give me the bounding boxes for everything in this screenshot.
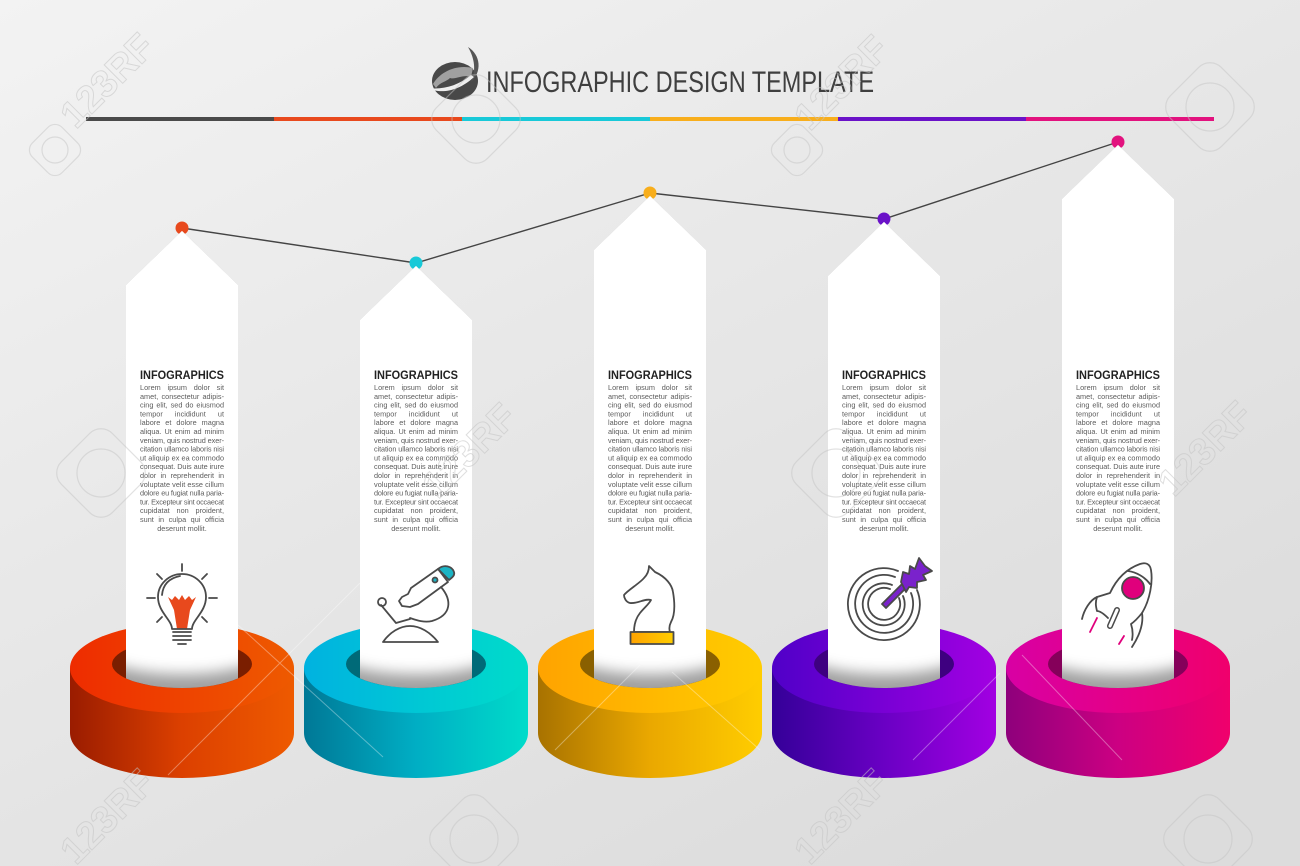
- logo mark: [428, 47, 479, 100]
- body text: labore et dolore magna: [140, 418, 225, 427]
- body text: voluptate velit esse cillum: [374, 480, 458, 489]
- body text: tempor incididunt ut: [608, 409, 692, 418]
- body text: cupidatat non proident,: [608, 506, 692, 515]
- body text: citation ullamco laboris nisi: [1076, 445, 1160, 454]
- step 3: [538, 185, 762, 778]
- body text: consequat. Duis aute irure: [608, 462, 692, 471]
- body text: dolore eu fugiat nulla paria-: [608, 489, 693, 498]
- body text: voluptate velit esse cillum: [608, 480, 692, 489]
- body text: sunt in culpa qui officia: [140, 515, 225, 524]
- body text: dolor in reprehenderit in: [1076, 471, 1160, 480]
- body text: dolor in reprehenderit in: [374, 471, 458, 480]
- marker dot: [410, 256, 422, 270]
- body text: cing elit, sed do eiusmod: [1076, 401, 1160, 410]
- body text: voluptate velit esse cillum: [842, 480, 926, 489]
- body text: amet, consectetur adipis-: [374, 392, 459, 401]
- body text: sunt in culpa qui officia: [1076, 515, 1161, 524]
- body text: dolore eu fugiat nulla paria-: [140, 489, 225, 498]
- step 5: [1006, 135, 1230, 778]
- body text: [608, 383, 693, 533]
- heading: INFOGRAPHICS: [140, 368, 224, 382]
- body text: citation ullamco laboris nisi: [140, 445, 224, 454]
- heading: INFOGRAPHICS: [608, 368, 692, 382]
- body text: Lorem ipsum dolor sit: [374, 383, 458, 392]
- base ring: purple: [772, 623, 996, 778]
- body text: deserunt mollit.: [157, 524, 207, 533]
- base ring: amber: [538, 623, 762, 778]
- body text: veniam, quis nostrud exer-: [374, 436, 459, 445]
- colour bar: [86, 117, 1214, 121]
- arrow column: [594, 196, 706, 688]
- body text: dolor in reprehenderit in: [608, 471, 692, 480]
- heading: INFOGRAPHICS: [1076, 368, 1160, 382]
- marker dot: [176, 222, 188, 234]
- body text: tur. Excepteur sint occaecat: [1076, 497, 1160, 506]
- body text: aliqua. Ut enim ad minim: [140, 427, 224, 436]
- header: [86, 47, 1214, 121]
- body text: veniam, quis nostrud exer-: [140, 436, 225, 445]
- base ring: red: [70, 623, 294, 778]
- step 4: [772, 210, 996, 778]
- body text: [140, 383, 225, 533]
- body text: dolore eu fugiat nulla paria-: [374, 489, 459, 498]
- body text: voluptate velit esse cillum: [1076, 480, 1160, 489]
- body text: amet, consectetur adipis-: [842, 392, 927, 401]
- body text: Lorem ipsum dolor sit: [140, 383, 224, 392]
- watermark: 123RF: [1151, 394, 1261, 504]
- base ring: magenta: [1006, 623, 1230, 778]
- body text: labore et dolore magna: [1076, 418, 1161, 427]
- body text: labore et dolore magna: [842, 418, 927, 427]
- body text: amet, consectetur adipis-: [608, 392, 693, 401]
- body text: tempor incididunt ut: [374, 409, 458, 418]
- body text: tur. Excepteur sint occaecat: [608, 497, 692, 506]
- body text: tempor incididunt ut: [1076, 409, 1160, 418]
- watermark: 123RF: [53, 26, 163, 136]
- body text: Lorem ipsum dolor sit: [842, 383, 926, 392]
- body text: cing elit, sed do eiusmod: [608, 401, 692, 410]
- body text: cing elit, sed do eiusmod: [374, 401, 458, 410]
- body text: Lorem ipsum dolor sit: [608, 383, 692, 392]
- body text: [1076, 383, 1161, 533]
- body text: amet, consectetur adipis-: [1076, 392, 1161, 401]
- body text: deserunt mollit.: [625, 524, 675, 533]
- body text: cing elit, sed do eiusmod: [842, 401, 926, 410]
- body text: aliqua. Ut enim ad minim: [1076, 427, 1160, 436]
- body text: tur. Excepteur sint occaecat: [140, 497, 224, 506]
- body text: deserunt mollit.: [1093, 524, 1143, 533]
- body text: labore et dolore magna: [374, 418, 459, 427]
- icon: chess knight: [624, 566, 674, 644]
- body text: dolore eu fugiat nulla paria-: [842, 489, 927, 498]
- watermark: 123RF: [787, 28, 897, 138]
- body text: consequat. Duis aute irure: [374, 462, 458, 471]
- body text: veniam, quis nostrud exer-: [608, 436, 693, 445]
- body text: cupidatat non proident,: [140, 506, 224, 515]
- body text: dolor in reprehenderit in: [140, 471, 224, 480]
- body text: [842, 383, 927, 533]
- body text: dolor in reprehenderit in: [842, 471, 926, 480]
- body text: citation ullamco laboris nisi: [842, 445, 926, 454]
- body text: aliqua. Ut enim ad minim: [842, 427, 926, 436]
- body text: ut aliquip ex ea commodo: [374, 453, 458, 462]
- body text: citation ullamco laboris nisi: [608, 445, 692, 454]
- body text: ut aliquip ex ea commodo: [608, 453, 692, 462]
- body text: tempor incididunt ut: [140, 409, 224, 418]
- body text: tempor incididunt ut: [842, 409, 926, 418]
- marker dot: [1112, 136, 1124, 148]
- step 2: [304, 255, 528, 778]
- base ring: cyan: [304, 623, 528, 778]
- body text: dolore eu fugiat nulla paria-: [1076, 489, 1161, 498]
- body text: cing elit, sed do eiusmod: [140, 401, 224, 410]
- heading: INFOGRAPHICS: [842, 368, 926, 382]
- watermark: 123RF: [415, 396, 525, 506]
- marker dot: [644, 186, 656, 200]
- icon: rocket: [1082, 563, 1152, 647]
- body text: cupidatat non proident,: [1076, 506, 1160, 515]
- title: INFOGRAPHIC DESIGN TEMPLATE: [486, 66, 874, 99]
- body text: sunt in culpa qui officia: [842, 515, 927, 524]
- body text: aliqua. Ut enim ad minim: [608, 427, 692, 436]
- arrow column: [1062, 145, 1174, 688]
- icon: target with dart: [848, 558, 932, 640]
- body text: aliqua. Ut enim ad minim: [374, 427, 458, 436]
- step 1: [70, 220, 294, 778]
- body text: Lorem ipsum dolor sit: [1076, 383, 1160, 392]
- body text: cupidatat non proident,: [374, 506, 458, 515]
- body text: tur. Excepteur sint occaecat: [842, 497, 926, 506]
- arrow column: [126, 231, 238, 688]
- body text: veniam, quis nostrud exer-: [1076, 436, 1161, 445]
- body text: consequat. Duis aute irure: [842, 462, 926, 471]
- body text: consequat. Duis aute irure: [140, 462, 224, 471]
- body text: consequat. Duis aute irure: [1076, 462, 1160, 471]
- arrow column: [828, 222, 940, 688]
- heading: INFOGRAPHICS: [374, 368, 458, 382]
- body text: veniam, quis nostrud exer-: [842, 436, 927, 445]
- icon: light bulb: [147, 564, 217, 644]
- body text: labore et dolore magna: [608, 418, 693, 427]
- body text: cupidatat non proident,: [842, 506, 926, 515]
- body text: deserunt mollit.: [391, 524, 441, 533]
- body text: ut aliquip ex ea commodo: [140, 453, 224, 462]
- body text: [374, 383, 459, 533]
- body text: voluptate velit esse cillum: [140, 480, 224, 489]
- body text: sunt in culpa qui officia: [608, 515, 693, 524]
- arrow column: [360, 266, 472, 688]
- body text: ut aliquip ex ea commodo: [1076, 453, 1160, 462]
- body text: amet, consectetur adipis-: [140, 392, 225, 401]
- body text: tur. Excepteur sint occaecat: [374, 497, 458, 506]
- marker dot: [878, 212, 890, 226]
- body text: deserunt mollit.: [859, 524, 909, 533]
- icon: microscope: [378, 566, 454, 642]
- body text: sunt in culpa qui officia: [374, 515, 459, 524]
- body text: citation ullamco laboris nisi: [374, 445, 458, 454]
- connector line: [182, 142, 1118, 263]
- body text: ut aliquip ex ea commodo: [842, 453, 926, 462]
